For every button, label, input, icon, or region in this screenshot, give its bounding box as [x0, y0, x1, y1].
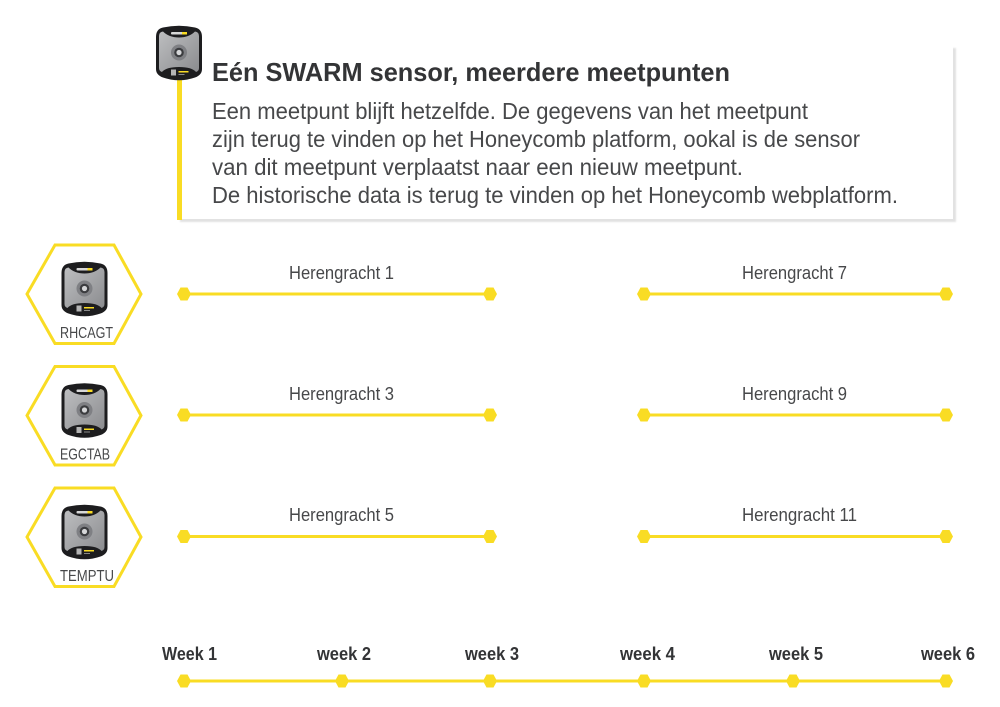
timeline: Herengracht 1: Herengracht 1 — [289, 263, 394, 283]
yellow accent bar — [177, 78, 182, 220]
week axis — [162, 644, 975, 688]
heading: Eén SWARM sensor, meerdere meetpunten — [212, 57, 730, 87]
panel: intro text card — [177, 46, 956, 222]
timeline: Herengracht 7 — [637, 263, 953, 300]
hexagon: sensor RHCAGT: RHCAGT — [60, 325, 113, 342]
week axis: week 2 — [316, 644, 371, 664]
timeline: Herengracht 3 — [177, 384, 497, 422]
week axis: week 4 — [619, 644, 675, 664]
text block: description: zijn terug te vinden op het Honeycomb platform, ookal is de sensor — [212, 126, 860, 152]
timeline: Herengracht 7: Herengracht 7 — [742, 263, 847, 283]
timeline: Herengracht 9: Herengracht 9 — [742, 384, 847, 404]
text block: description — [212, 98, 898, 208]
hexagon: sensor RHCAGT — [27, 245, 141, 344]
hexagon: sensor EGCTAB — [27, 366, 141, 465]
week axis: week 5 — [768, 644, 823, 664]
timeline: Herengracht 11: Herengracht 11 — [742, 505, 857, 525]
hexagon: sensor TEMPTU: TEMPTU — [60, 568, 114, 585]
icon: header sensor — [156, 26, 202, 80]
timeline: Herengracht 1 — [177, 263, 497, 300]
hexagon: sensor TEMPTU — [27, 488, 141, 586]
text block: description: De historische data is terug te vinden op het Honeycomb webplatform. — [212, 182, 898, 208]
week axis: Week 1 — [162, 644, 217, 664]
timeline: Herengracht 5 — [177, 505, 497, 543]
week axis: week 6 — [920, 644, 975, 664]
text block: description: van dit meetpunt verplaatst naar een nieuw meetpunt. — [212, 154, 743, 180]
hexagon: sensor EGCTAB: EGCTAB — [60, 446, 110, 464]
timeline: Herengracht 5: Herengracht 5 — [289, 505, 394, 525]
timeline: Herengracht 3: Herengracht 3 — [289, 384, 394, 404]
timeline: Herengracht 9 — [637, 384, 953, 422]
timeline: Herengracht 11 — [637, 505, 953, 543]
text block: description: Een meetpunt blijft hetzelfde. De gegevens van het meetpunt — [212, 98, 809, 124]
week axis: week 3 — [464, 644, 519, 664]
